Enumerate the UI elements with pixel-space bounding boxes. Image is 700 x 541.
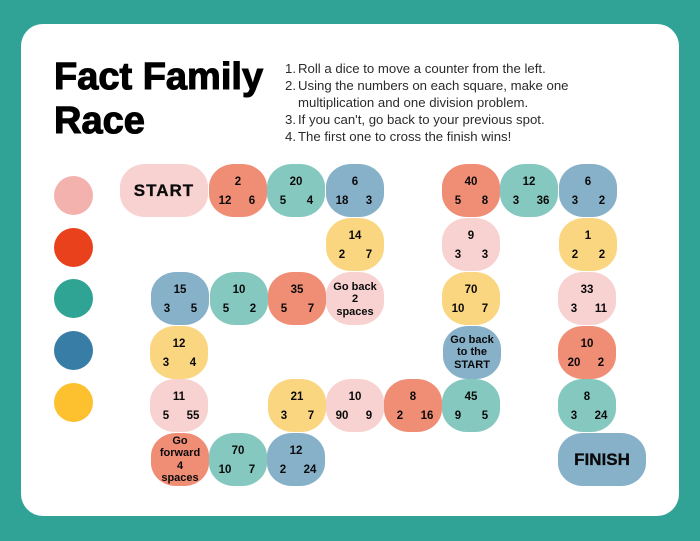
title: [54, 56, 264, 142]
tile 15 3 5: [151, 272, 209, 325]
tile go back 2 spaces: [326, 272, 384, 325]
tile 11 5 55: 5: [163, 410, 169, 422]
tile 35 5 7: [268, 272, 326, 325]
tile 10 5 2: 10: [233, 284, 245, 296]
tile 35 5 7: 35: [291, 284, 303, 296]
tile 6 18 3: 6: [352, 176, 358, 188]
tile 10 20 2: 2: [598, 357, 604, 369]
tile 15 3 5: 15: [174, 284, 186, 296]
tile 21 3 7: 3: [281, 410, 287, 422]
tile 1 2 2: [559, 218, 617, 271]
tile 10 20 2: 10: [581, 338, 593, 350]
tile 15 3 5: 3: [164, 303, 170, 315]
tile 45 9 5: 45: [465, 390, 477, 402]
instructions: 1.: [285, 60, 296, 76]
tile 2 12 6: 6: [249, 195, 255, 207]
tile 70 10 7: [442, 272, 500, 325]
instructions: [285, 60, 569, 144]
tile 1 2 2: 2: [572, 249, 578, 261]
tile 12 3 4: [150, 326, 208, 379]
tile 20 5 4: 4: [307, 195, 313, 207]
counter: red: [54, 228, 93, 267]
tile 20 5 4: 5: [280, 195, 286, 207]
tile 33 3 11: 11: [595, 303, 607, 315]
instructions: 4.: [285, 129, 296, 144]
tile 12 3 4: 3: [163, 357, 169, 369]
tile go forward 4 spaces: spaces: [161, 472, 199, 484]
tile 8 2 16: [384, 379, 442, 432]
instructions: multiplication and one division problem.: [298, 95, 528, 110]
tile 9 3 3: [442, 218, 500, 271]
tile 20 5 4: [267, 164, 325, 217]
tile 70 10 7: 10: [219, 464, 231, 476]
tile 1 2 2: 2: [599, 249, 605, 261]
tile 12 3 36: 12: [523, 176, 535, 188]
counter: yellow: [54, 383, 93, 422]
tile 21 3 7: 7: [308, 410, 314, 422]
tile go forward 4 spaces: [151, 433, 209, 486]
tile 11 5 55: 55: [187, 410, 199, 422]
tile 14 2 7: [326, 218, 384, 271]
tile 11 5 55: 11: [173, 390, 185, 402]
tile go forward 4 spaces: 4: [177, 460, 183, 472]
tile 14 2 7: 7: [366, 249, 372, 261]
tile go back to the start: [443, 326, 501, 379]
tile go forward 4 spaces: Go: [172, 435, 188, 447]
tile 33 3 11: 3: [571, 303, 577, 315]
tile 11 5 55: [150, 379, 208, 432]
finish tile: [558, 433, 646, 486]
tile 6 3 2: [559, 164, 617, 217]
tile 40 5 8: 5: [455, 195, 461, 207]
start tile: [120, 164, 208, 217]
tile 10 5 2: 2: [250, 303, 256, 315]
tile 10 5 2: [210, 272, 268, 325]
instructions: 3.: [285, 112, 296, 127]
tile 2 12 6: 2: [235, 176, 241, 188]
tile 40 5 8: 40: [465, 176, 477, 188]
tile go back 2 spaces: Go back: [333, 281, 377, 293]
instructions: If you can't, go back to your previous spot.: [298, 112, 545, 127]
tile 8 2 16: 2: [397, 410, 403, 422]
tile 8 3 24: 8: [584, 390, 590, 402]
tile 12 3 36: [500, 164, 558, 217]
tile 6 18 3: 18: [336, 195, 348, 207]
tile 2 12 6: [209, 164, 267, 217]
tile 40 5 8: [442, 164, 500, 217]
start tile: START: [134, 181, 194, 200]
tile 12 2 24: 12: [290, 444, 302, 456]
tile 14 2 7: 2: [339, 249, 345, 261]
tile 10 90 9: 9: [366, 410, 372, 422]
tile 8 2 16: 8: [410, 390, 416, 402]
tile 12 3 36: 3: [513, 195, 519, 207]
tile 14 2 7: 14: [349, 230, 361, 242]
title: Race: [54, 100, 145, 142]
tile 21 3 7: [268, 379, 326, 432]
tile 12 2 24: 2: [280, 464, 286, 476]
tile 6 18 3: 3: [366, 195, 372, 207]
tile 70 10 7: 10: [452, 303, 464, 315]
tile 70 10 7: 7: [249, 464, 255, 476]
finish tile: FINISH: [574, 450, 630, 469]
tile 33 3 11: 33: [581, 284, 593, 296]
tile 12 2 24: 24: [304, 464, 316, 476]
tile 1 2 2: 1: [585, 230, 591, 242]
tile 6 3 2: 6: [585, 176, 591, 188]
instructions: Roll a dice to move a counter from the left.: [298, 60, 546, 76]
tile 21 3 7: 21: [291, 390, 303, 402]
tile 6 3 2: 3: [572, 195, 578, 207]
tile go forward 4 spaces: forward: [160, 447, 200, 459]
tile 45 9 5: 9: [455, 410, 461, 422]
tile 45 9 5: [442, 379, 500, 432]
tile 10 5 2: 5: [223, 303, 229, 315]
tile 8 2 16: 16: [421, 410, 433, 422]
tile 12 3 4: 12: [173, 338, 185, 350]
tile 33 3 11: [558, 272, 616, 325]
tile 10 90 9: 10: [349, 390, 361, 402]
instructions: Using the numbers on each square, make one: [298, 78, 569, 93]
tile go back 2 spaces: 2: [352, 293, 358, 305]
tile 12 3 36: 36: [537, 195, 549, 207]
tile 20 5 4: 20: [290, 176, 302, 188]
tile 6 18 3: [326, 164, 384, 217]
tile 15 3 5: 5: [191, 303, 197, 315]
tile 35 5 7: 7: [308, 303, 314, 315]
counter: pink: [54, 176, 93, 215]
tile 10 90 9: 90: [336, 410, 348, 422]
tile 10 20 2: [558, 326, 616, 379]
tile 70 10 7: [209, 433, 267, 486]
tile 9 3 3: 9: [468, 230, 474, 242]
tile 12 3 4: 4: [190, 357, 196, 369]
tile 9 3 3: 3: [482, 249, 488, 261]
tile go back to the start: Go back: [450, 334, 494, 346]
tile 40 5 8: 8: [482, 195, 488, 207]
tile 70 10 7: 70: [465, 284, 477, 296]
title: Fact Family: [54, 56, 263, 98]
tile 12 2 24: [267, 433, 325, 486]
tile 9 3 3: 3: [455, 249, 461, 261]
instructions: The first one to cross the finish wins!: [298, 129, 511, 144]
tile 70 10 7: 7: [482, 303, 488, 315]
tile 8 3 24: 24: [595, 410, 607, 422]
tile 8 3 24: 3: [571, 410, 577, 422]
tile 10 20 2: 20: [568, 357, 580, 369]
tile 70 10 7: 70: [232, 444, 244, 456]
tile 6 3 2: 2: [599, 195, 605, 207]
tile go back to the start: START: [454, 359, 490, 371]
counter: teal: [54, 279, 93, 318]
tile 8 3 24: [558, 379, 616, 432]
tile go back to the start: to the: [457, 346, 487, 358]
tile 2 12 6: 12: [219, 195, 231, 207]
counter: blue: [54, 331, 93, 370]
tile 10 90 9: [326, 379, 384, 432]
instructions: 2.: [285, 78, 296, 93]
tile 45 9 5: 5: [482, 410, 488, 422]
tile 35 5 7: 5: [281, 303, 287, 315]
tile go back 2 spaces: spaces: [336, 306, 374, 318]
